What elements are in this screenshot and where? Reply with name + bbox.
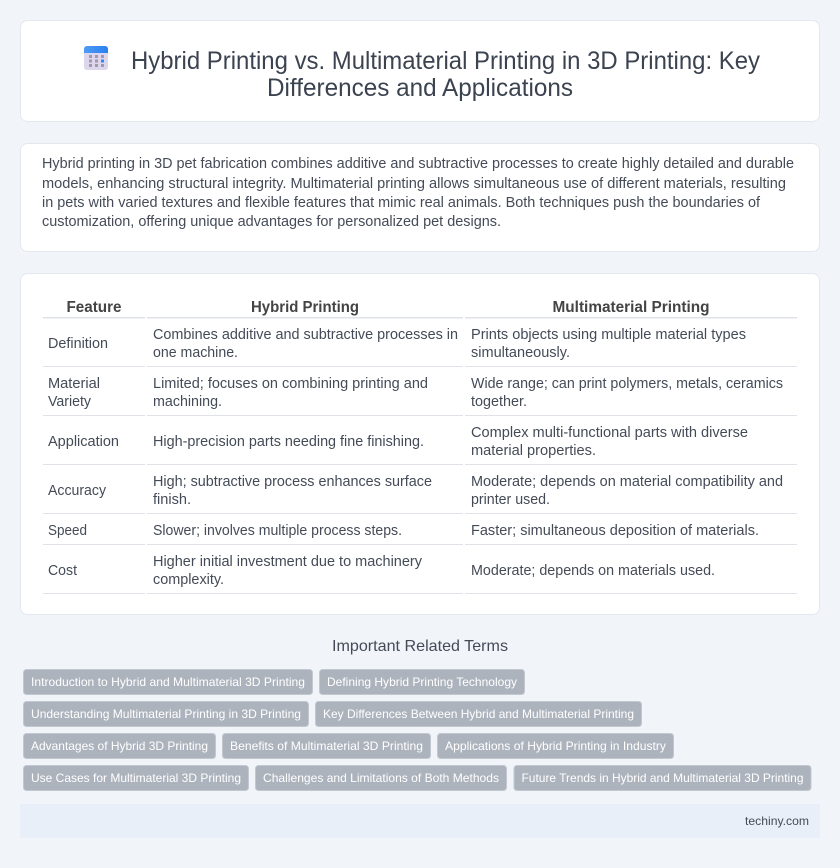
text block: introduction: Hybrid printing in 3D pet fabrication combines additive and subtractive processes to create highly detailed and durable xyxy=(42,156,794,172)
row: application xyxy=(48,425,748,459)
related term tags: Applications of Hybrid Printing in Industry xyxy=(445,739,666,753)
row: definition: Combines additive and subtractive processes in xyxy=(153,327,458,343)
table header: Hybrid Printing xyxy=(251,299,359,316)
related term tags: Use Cases for Multimaterial 3D Printing xyxy=(31,771,241,785)
row: material variety: Wide range; can print polymers, metals, ceramics xyxy=(471,376,783,392)
related term tags: Understanding Multimaterial Printing in 3D Printing xyxy=(31,707,301,721)
related term tags: Key Differences Between Hybrid and Multimaterial Printing xyxy=(323,707,634,721)
panel: comparison table xyxy=(20,274,820,614)
heading: important related terms: Important Related Terms xyxy=(332,638,508,655)
title: Hybrid Printing vs. Multimaterial Printing in 3D Printing: Key xyxy=(131,47,760,75)
row: material variety xyxy=(48,376,783,410)
related term tags: Defining Hybrid Printing Technology xyxy=(327,675,517,689)
related term tags xyxy=(24,670,811,790)
row: definition: Definition xyxy=(48,336,108,352)
row: cost: Higher initial investment due to machinery xyxy=(153,554,423,570)
row: accuracy: Accuracy xyxy=(48,483,107,499)
row: cost xyxy=(48,554,715,588)
text block: introduction: customization, offering unique advantages for personalized pet designs. xyxy=(42,214,501,230)
row: definition xyxy=(48,327,746,361)
row: definition: simultaneously. xyxy=(471,345,570,361)
row: definition: Prints objects using multiple material types xyxy=(471,327,746,343)
table header: Feature xyxy=(66,299,122,316)
text block: introduction: in pets with varied textures and flexible features that mimic real animals. Both techniques push the boundaries of xyxy=(42,195,761,211)
row: definition: one machine. xyxy=(153,345,238,361)
row: application: Application xyxy=(48,434,119,450)
row: speed: Slower; involves multiple process steps. xyxy=(153,523,402,539)
row: material variety: together. xyxy=(471,394,527,410)
title: Differences and Applications xyxy=(267,74,573,102)
row: application: material properties. xyxy=(471,443,596,459)
related term tags: Introduction to Hybrid and Multimaterial 3D Printing xyxy=(31,675,305,689)
row: cost: Moderate; depends on materials used. xyxy=(471,563,715,579)
related term tags: Advantages of Hybrid 3D Printing xyxy=(31,739,208,753)
row: speed: Speed xyxy=(48,523,87,539)
text block: introduction: models, enhancing structural integrity. Multimaterial printing allows simultaneous use of different materials, resulting xyxy=(42,176,786,192)
table header xyxy=(66,299,710,316)
row: accuracy xyxy=(48,474,783,508)
panel: title card xyxy=(20,20,820,122)
row: speed xyxy=(48,523,759,539)
table header: Multimaterial Printing xyxy=(552,299,710,316)
footer: techiny.com xyxy=(745,814,809,828)
row: application: High-precision parts needing fine finishing. xyxy=(153,434,424,450)
row: material variety: Material xyxy=(48,376,100,392)
row: speed: Faster; simultaneous deposition of materials. xyxy=(471,523,759,539)
row: material variety: machining. xyxy=(153,394,222,410)
row: application: Complex multi-functional parts with diverse xyxy=(471,425,748,441)
row: accuracy: High; subtractive process enhances surface xyxy=(153,474,432,490)
row: cost: complexity. xyxy=(153,572,224,588)
row: material variety: Limited; focuses on combining printing and xyxy=(153,376,428,392)
panel: intro paragraph xyxy=(20,144,820,252)
row: material variety: Variety xyxy=(48,394,92,410)
row: accuracy: finish. xyxy=(153,492,191,508)
title xyxy=(131,47,760,102)
related term tags: Future Trends in Hybrid and Multimaterial 3D Printing xyxy=(522,771,804,785)
row: cost: Cost xyxy=(48,563,77,579)
footer xyxy=(20,804,820,838)
text block: introduction xyxy=(42,156,794,230)
row: accuracy: Moderate; depends on material compatibility and xyxy=(471,474,783,490)
related term tags: Challenges and Limitations of Both Methods xyxy=(263,771,499,785)
icon: calendar grid xyxy=(84,46,108,70)
related term tags: Benefits of Multimaterial 3D Printing xyxy=(230,739,423,753)
row: accuracy: printer used. xyxy=(471,492,550,508)
